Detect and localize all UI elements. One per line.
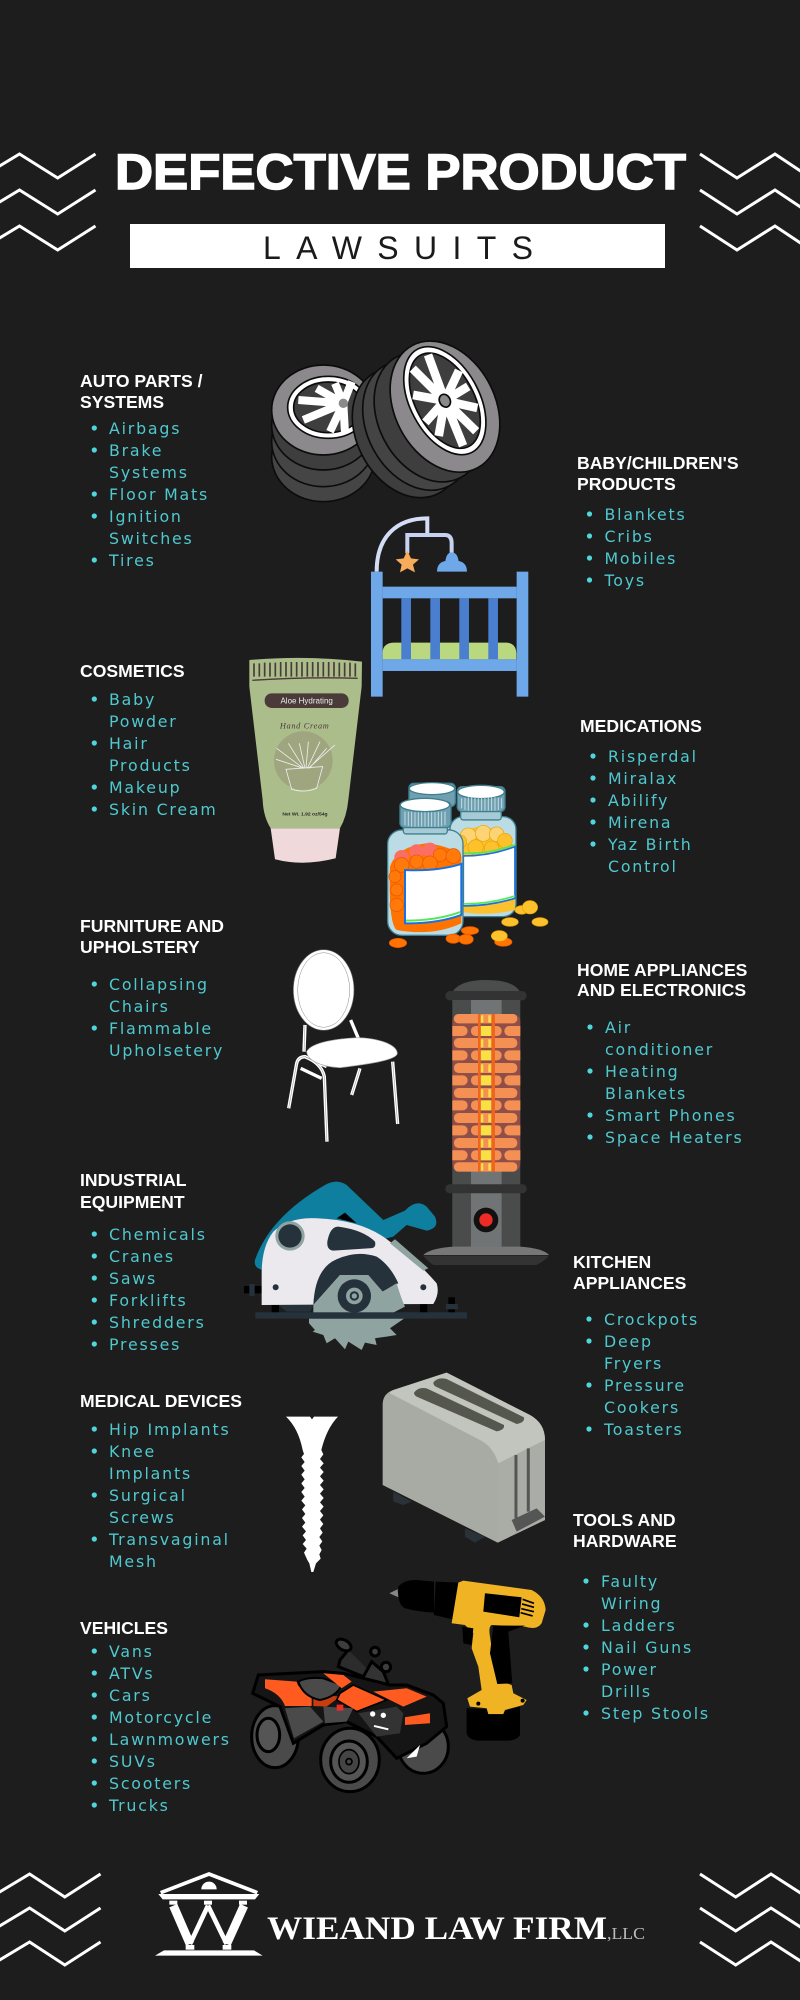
heading: AUTO PARTS / — [80, 371, 203, 391]
list: Presses — [109, 1335, 181, 1354]
list: Pressure — [604, 1376, 686, 1395]
list — [586, 1310, 699, 1439]
list: Blankets — [605, 1084, 687, 1103]
heading: AND ELECTRONICS — [577, 980, 746, 1000]
list — [587, 505, 687, 590]
list: Systems — [109, 463, 189, 482]
list: Switches — [109, 529, 194, 548]
list: Cookers — [604, 1398, 680, 1417]
list — [92, 690, 218, 819]
list: Risperdal — [608, 747, 698, 766]
icon: medicine bottles — [388, 783, 548, 948]
panel: baby products — [577, 453, 739, 590]
list: Upholsetery — [109, 1041, 224, 1060]
list: Tires — [108, 551, 156, 570]
heading: INDUSTRIAL — [80, 1170, 187, 1190]
list: Step Stools — [601, 1704, 710, 1723]
subtitle banner: LAWSUITS — [263, 230, 533, 266]
list: Shredders — [109, 1313, 206, 1332]
list: Air — [605, 1018, 632, 1037]
chevrons: top left — [0, 154, 96, 250]
icon: hand cream tube — [249, 658, 362, 863]
list: Chairs — [109, 997, 170, 1016]
heading: HOME APPLIANCES — [577, 960, 748, 980]
list: Cribs — [604, 527, 654, 546]
list: Faulty — [601, 1572, 659, 1591]
list: Cars — [109, 1686, 152, 1705]
logo — [155, 1874, 645, 1956]
list: Trucks — [108, 1796, 170, 1815]
heading: APPLIANCES — [573, 1273, 687, 1293]
panel: cosmetics — [80, 661, 218, 819]
list: Chemicals — [109, 1225, 207, 1244]
list: Collapsing — [109, 975, 209, 994]
list: Cranes — [109, 1247, 175, 1266]
chevrons: top right — [700, 154, 800, 250]
list: Mirena — [608, 813, 672, 832]
icon: screw — [286, 1417, 338, 1572]
icon: crib with mobile — [371, 518, 528, 697]
list: Hip Implants — [109, 1420, 230, 1439]
list — [92, 975, 224, 1060]
list — [92, 1642, 231, 1815]
list — [587, 1018, 743, 1147]
icon: power drill — [389, 1580, 546, 1741]
heading: SYSTEMS — [80, 392, 164, 412]
list: SUVs — [109, 1752, 157, 1771]
chevrons: bottom right — [700, 1874, 800, 1965]
list: Implants — [109, 1464, 192, 1483]
list: Yaz Birth — [607, 835, 693, 854]
icon: toaster — [383, 1373, 545, 1543]
list: conditioner — [605, 1040, 714, 1059]
list: Lawnmowers — [109, 1730, 231, 1749]
heading: COSMETICS — [80, 661, 185, 681]
list: Miralax — [608, 769, 678, 788]
list: Blankets — [604, 505, 687, 524]
list: Products — [109, 756, 192, 775]
icon: chair — [289, 950, 398, 1142]
list: Abilify — [608, 791, 669, 810]
list: Saws — [109, 1269, 157, 1288]
list: Nail Guns — [601, 1638, 693, 1657]
list: Wiring — [601, 1594, 662, 1613]
icon: circular saw — [244, 1182, 467, 1350]
panel: home appliances — [577, 960, 748, 1147]
list: Makeup — [109, 778, 181, 797]
list: Motorcycle — [109, 1708, 213, 1727]
list: Space Heaters — [605, 1128, 743, 1147]
list: Smart Phones — [605, 1106, 737, 1125]
list — [92, 419, 209, 570]
list: Drills — [601, 1682, 652, 1701]
panel: furniture — [80, 916, 224, 1060]
heading: MEDICATIONS — [580, 716, 702, 736]
panel: tools and hardware — [573, 1510, 710, 1723]
list: Floor Mats — [109, 485, 209, 504]
panel: auto parts — [80, 371, 209, 570]
logo mark — [155, 1874, 263, 1956]
list — [92, 1225, 207, 1354]
list — [92, 1420, 230, 1571]
list: Hair — [109, 734, 149, 753]
list: Toys — [604, 571, 646, 590]
panel: medical devices — [80, 1391, 242, 1571]
heading: KITCHEN — [573, 1252, 651, 1272]
heading: UPHOLSTERY — [80, 937, 200, 957]
list: Skin Cream — [109, 800, 218, 819]
icon: hand cream tube: Hand Cream — [279, 722, 329, 731]
list: Powder — [109, 712, 178, 731]
list — [590, 747, 698, 876]
list: Flammable — [109, 1019, 213, 1038]
list: Heating — [605, 1062, 680, 1081]
icon: space heater — [423, 980, 549, 1265]
list: Fryers — [604, 1354, 663, 1373]
panel: medications — [580, 716, 702, 876]
list: Mesh — [109, 1552, 158, 1571]
list: Surgical — [109, 1486, 187, 1505]
list: Deep — [604, 1332, 653, 1351]
list: Baby — [109, 690, 156, 709]
list: Brake — [109, 441, 163, 460]
icon: hand cream tube: Aloe Hydrating — [280, 697, 333, 706]
heading: EQUIPMENT — [80, 1192, 185, 1212]
panel: kitchen appliances — [573, 1252, 699, 1439]
list: Control — [608, 857, 678, 876]
list: Toasters — [603, 1420, 684, 1439]
chevrons: bottom left — [0, 1874, 100, 1965]
list: Crockpots — [604, 1310, 699, 1329]
suffix: ,LLC — [607, 1924, 645, 1943]
list: Screws — [109, 1508, 176, 1527]
list: Scooters — [109, 1774, 192, 1793]
title: DEFECTIVE PRODUCT — [115, 144, 686, 200]
heading: TOOLS AND — [573, 1510, 676, 1530]
icon: tires — [272, 322, 524, 517]
list: ATVs — [109, 1664, 154, 1683]
heading: HARDWARE — [573, 1531, 677, 1551]
panel: vehicles — [80, 1618, 231, 1815]
panel: industrial equipment — [80, 1170, 207, 1354]
heading: PRODUCTS — [577, 474, 676, 494]
list: Transvaginal — [108, 1530, 230, 1549]
list: Ladders — [601, 1616, 677, 1635]
list: Mobiles — [604, 549, 677, 568]
subtitle banner — [130, 224, 665, 268]
list: Knee — [109, 1442, 156, 1461]
heading: MEDICAL DEVICES — [80, 1391, 242, 1411]
icon: hand cream tube: Net Wt. 1.92 oz/54g — [282, 811, 328, 817]
firm name: WIEAND LAW FIRM — [267, 1911, 607, 1947]
icon: ATV — [252, 1637, 448, 1792]
list: Airbags — [109, 419, 181, 438]
list: Forklifts — [109, 1291, 188, 1310]
list — [583, 1572, 710, 1723]
heading: BABY/CHILDREN'S — [577, 453, 739, 473]
list: Ignition — [109, 507, 183, 526]
list: Power — [601, 1660, 658, 1679]
heading: VEHICLES — [80, 1618, 168, 1638]
heading: FURNITURE AND — [80, 916, 224, 936]
list: Vans — [109, 1642, 154, 1661]
